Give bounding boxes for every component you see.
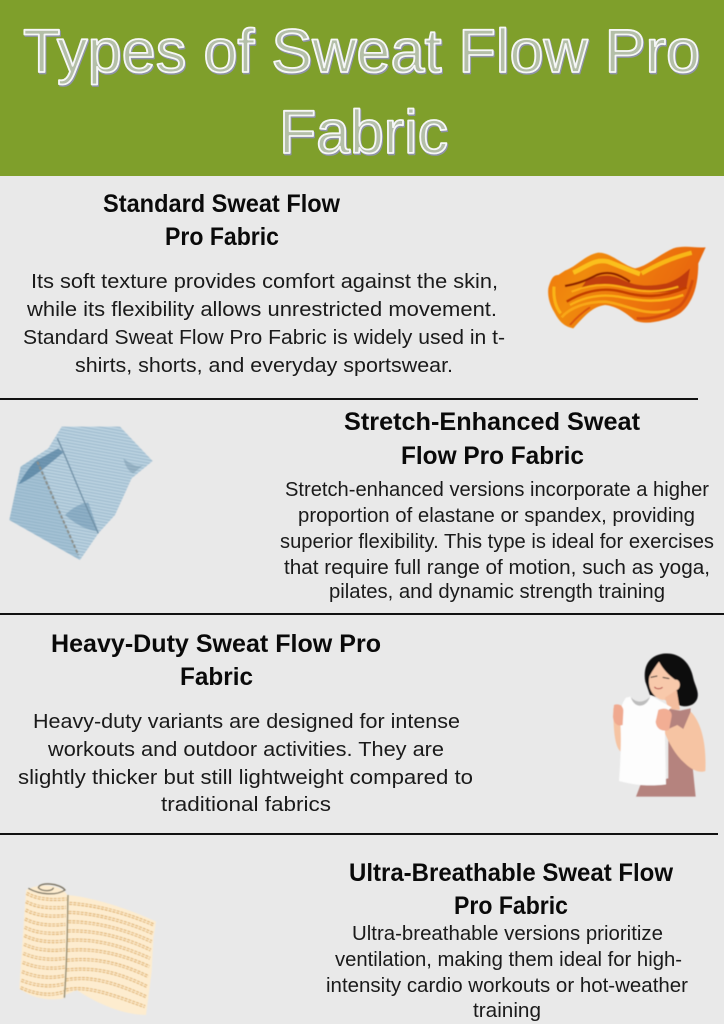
text: heavy-duty description: workouts and outdoor activities. They are xyxy=(47,738,444,761)
heading: stretch-enhanced: Stretch-Enhanced Sweat xyxy=(344,408,641,436)
heading: standard: Standard Sweat Flow xyxy=(103,190,341,218)
shirt xyxy=(619,696,672,785)
divider 3 xyxy=(0,833,718,835)
hands xyxy=(613,704,623,726)
arm xyxy=(664,712,706,772)
title xyxy=(23,17,701,168)
text: heavy-duty description xyxy=(18,710,473,816)
text: standard description: while its flexibility allows unrestricted movement. xyxy=(26,298,497,321)
icon: woman holding white shirt xyxy=(613,653,706,797)
text: standard description xyxy=(23,270,505,377)
text: stretch-enhanced description: proportion of elastane or spandex, providing xyxy=(298,504,695,527)
text: stretch-enhanced description: pilates, and dynamic strength training xyxy=(329,580,665,603)
hair xyxy=(645,653,698,706)
title: Fabric xyxy=(280,100,449,168)
text: stretch-enhanced description: superior flexibility. This type is ideal for exercises xyxy=(280,530,714,553)
text: stretch-enhanced description: that require full range of motion, such as yoga, xyxy=(284,556,710,579)
text: heavy-duty description: slightly thicker but still lightweight compared to xyxy=(18,766,473,789)
heading: heavy-duty xyxy=(51,630,381,691)
panel: heavy-duty fabric xyxy=(18,630,706,816)
heading: heavy-duty: Fabric xyxy=(180,663,253,691)
heading: ultra-breathable xyxy=(349,859,674,920)
icon: orange silk fabric xyxy=(548,247,706,328)
panel: standard fabric xyxy=(23,190,706,377)
heading: standard: Pro Fabric xyxy=(165,223,279,251)
heading: stretch-enhanced xyxy=(344,408,641,470)
icon: denim swatch xyxy=(9,427,153,560)
divider 1 xyxy=(0,398,698,400)
text: standard description: shirts, shorts, and everyday sportswear. xyxy=(75,354,453,377)
panel: ultra-breathable fabric xyxy=(19,859,688,1022)
text: heavy-duty description: traditional fabrics xyxy=(161,793,331,816)
text: ultra-breathable description: training xyxy=(473,999,541,1022)
dress xyxy=(636,708,696,797)
heading: stretch-enhanced: Flow Pro Fabric xyxy=(401,442,584,470)
text: stretch-enhanced description: Stretch-enhanced versions incorporate a higher xyxy=(285,478,709,501)
heading: heavy-duty: Heavy-Duty Sweat Flow Pro xyxy=(51,630,381,658)
panel: stretch-enhanced fabric xyxy=(9,408,714,603)
heading: ultra-breathable: Pro Fabric xyxy=(454,892,568,920)
neck xyxy=(665,690,680,710)
title: Types of Sweat Flow Pro xyxy=(23,17,700,85)
text: heavy-duty description: Heavy-duty variants are designed for intense xyxy=(33,710,460,733)
title: Types of Sweat Flow Pro xyxy=(24,19,701,87)
text: ultra-breathable description: intensity cardio workouts or hot-weather xyxy=(326,974,688,997)
face xyxy=(649,662,680,700)
icon: rolled mesh fabric xyxy=(19,884,156,1015)
text: standard description: Standard Sweat Flow Pro Fabric is widely used in t- xyxy=(23,326,505,349)
title: Fabric xyxy=(279,98,448,166)
text: standard description: Its soft texture provides comfort against the skin, xyxy=(31,270,498,293)
heading: standard xyxy=(103,190,341,251)
text: ultra-breathable description: Ultra-breathable versions prioritize xyxy=(352,922,663,945)
text: stretch-enhanced description xyxy=(280,478,714,603)
divider 2 xyxy=(0,613,724,615)
text: ultra-breathable description xyxy=(326,922,688,1022)
text: ultra-breathable description: ventilation, making them ideal for high- xyxy=(335,948,682,971)
heading: ultra-breathable: Ultra-Breathable Sweat Flow xyxy=(349,859,674,887)
header banner xyxy=(0,0,724,176)
